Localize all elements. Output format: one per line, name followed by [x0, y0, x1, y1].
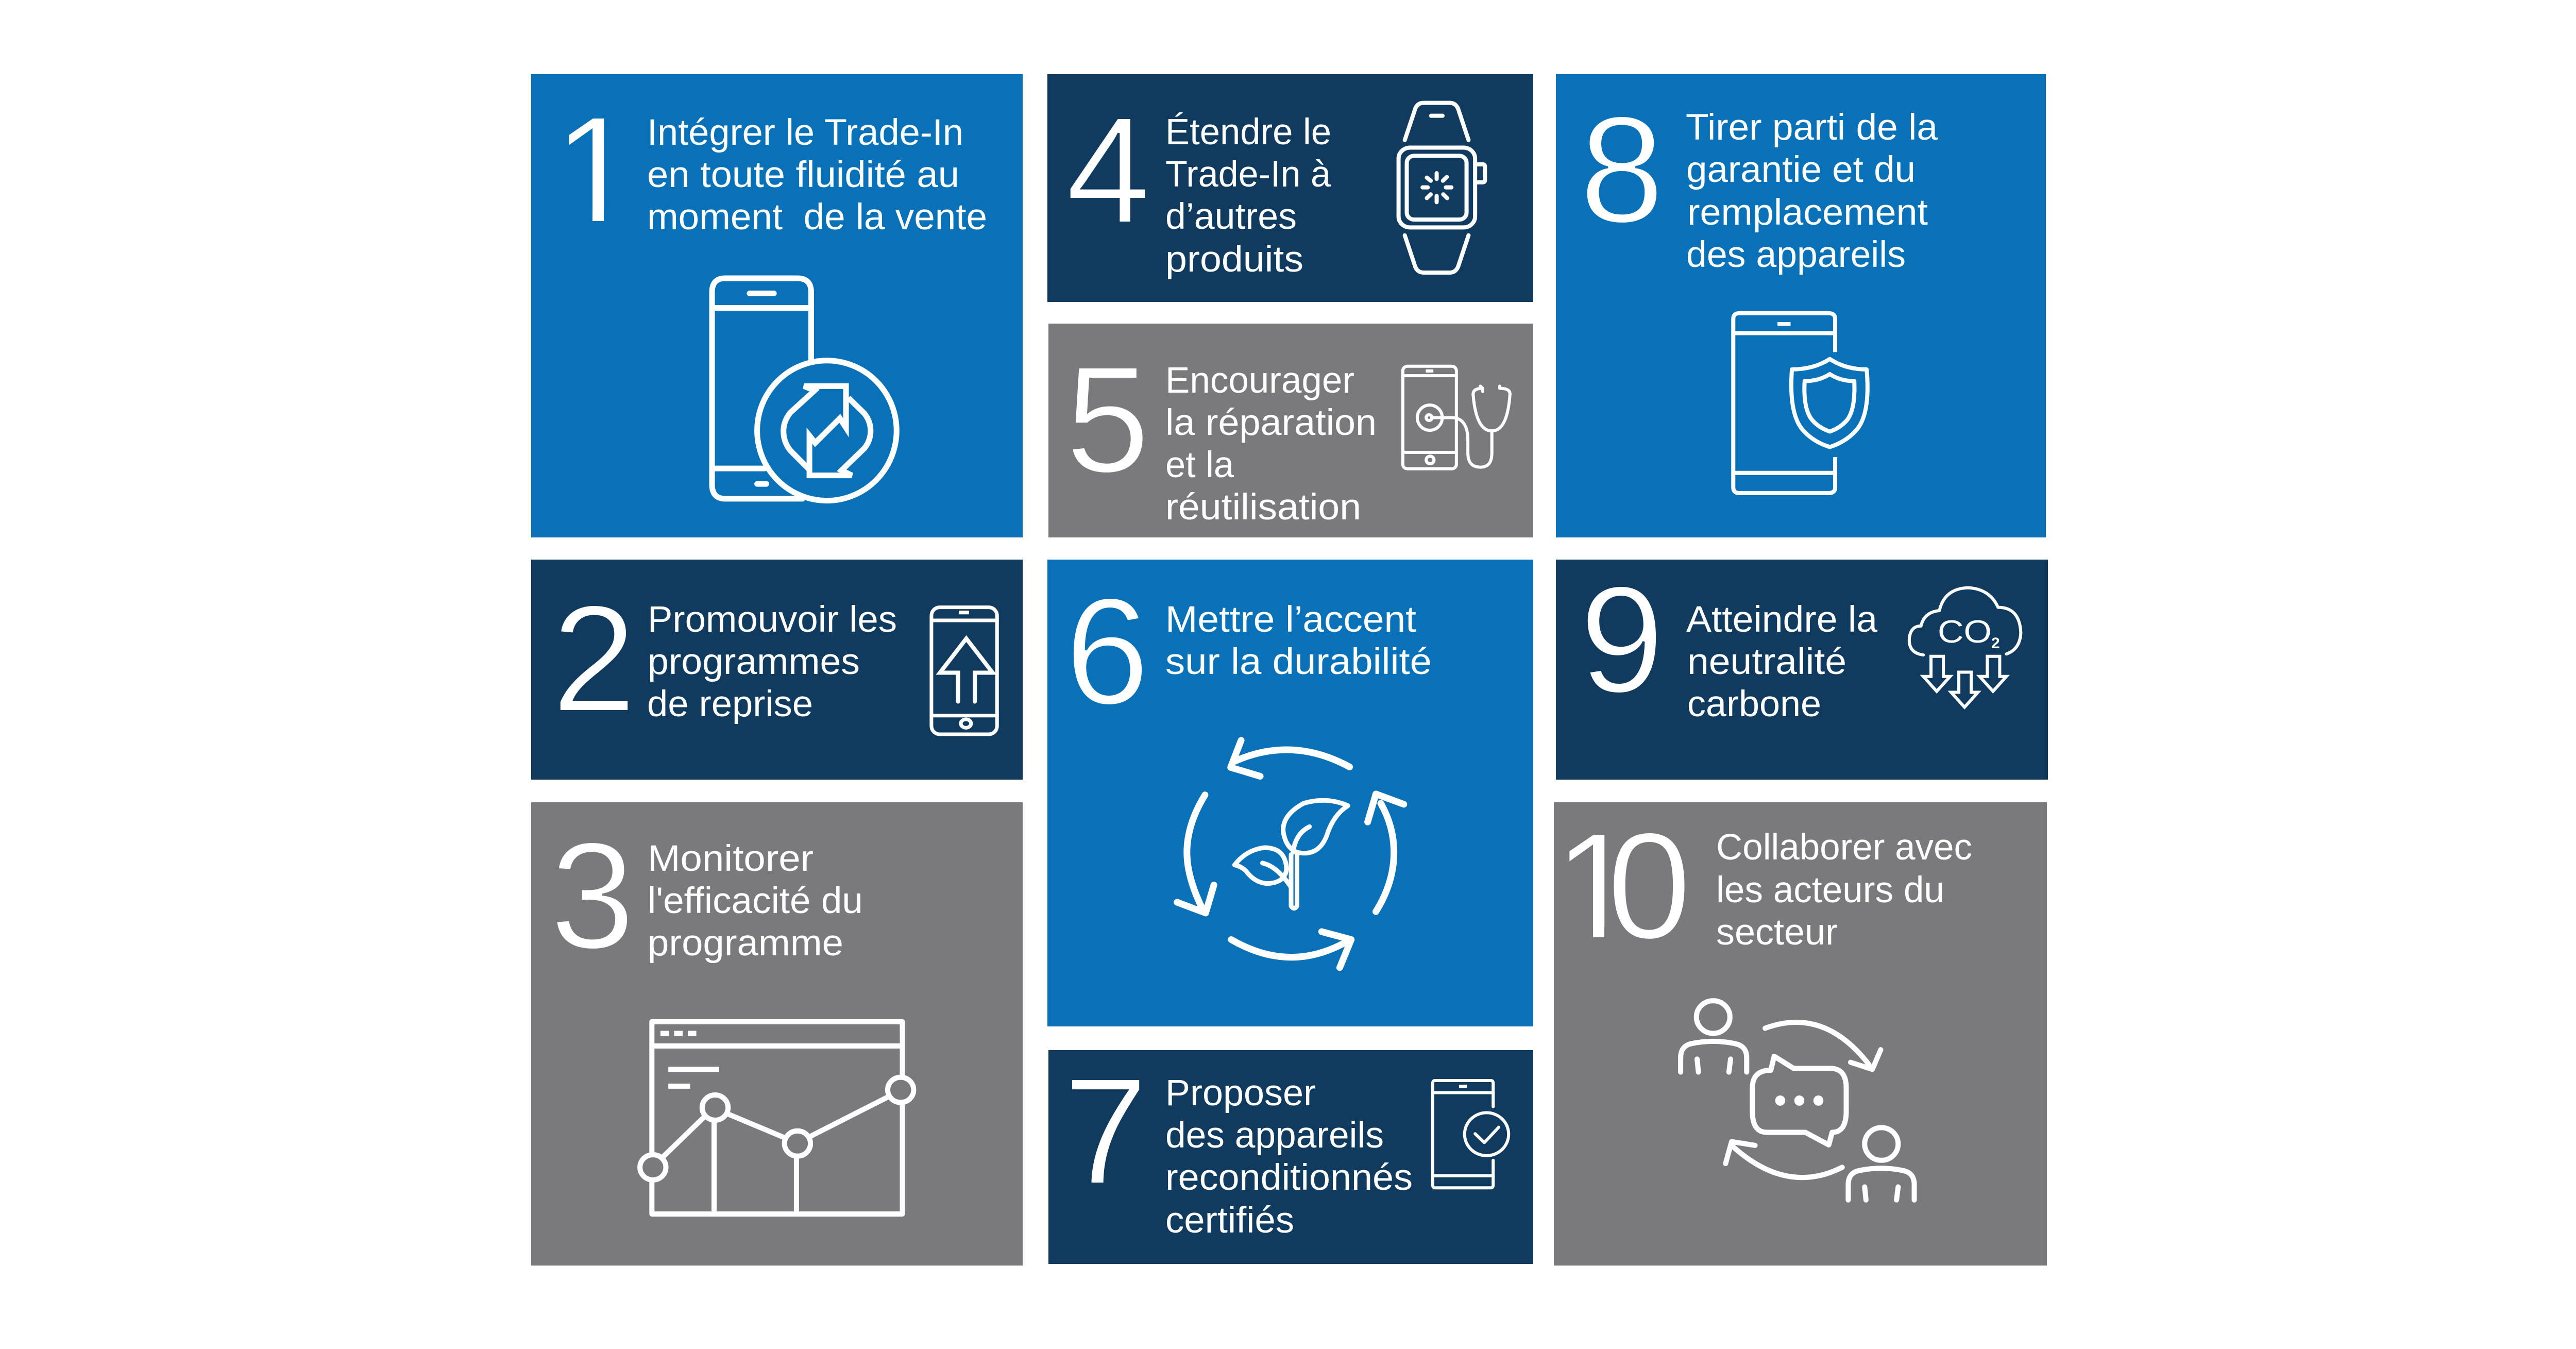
heading 3: programme: [648, 923, 843, 964]
icon: tablet with check mark: [1433, 1081, 1509, 1188]
heading 7: certifiés: [1165, 1200, 1294, 1241]
heading 10: Collaborer avec: [1716, 827, 1972, 868]
heading 4: Trade-In à: [1165, 154, 1331, 195]
heading 7: reconditionnés: [1165, 1157, 1413, 1198]
icon: phone with up arrow: [931, 608, 997, 734]
heading 4: [1165, 112, 1331, 280]
icon: phone with shield: [1733, 313, 1868, 493]
heading 2: [647, 599, 897, 724]
heading 1: moment de la vente: [647, 197, 987, 238]
panel 7: Proposer des appareils reconditionnés certifiés: [1048, 1046, 1533, 1264]
panel 8 background: [1556, 74, 2046, 537]
number 10: [1569, 833, 1685, 939]
panel 4: Étendre le Trade-In: [1047, 74, 1533, 302]
heading 2: Promouvoir les: [648, 599, 897, 640]
heading 8: des appareils: [1686, 234, 1906, 275]
panel 2: Promouvoir les programmes de reprise: [531, 560, 1023, 780]
number 1: 1: [553, 85, 638, 255]
heading 9: neutralité: [1687, 642, 1846, 682]
panel 7 background: [1048, 1050, 1533, 1264]
number 8: 8: [1580, 85, 1664, 255]
heading 4: Étendre le: [1165, 112, 1331, 153]
panel 9 background: [1556, 560, 2048, 780]
panel 4 background: [1047, 74, 1533, 302]
icon: phone with stethoscope: [1403, 366, 1510, 469]
heading 3: l'efficacité du: [648, 881, 863, 921]
number 10: 1: [1554, 801, 1638, 971]
panel 9: Atteindre la neutralité carbone: [1556, 554, 2048, 780]
heading 5: réutilisation: [1165, 487, 1361, 528]
panel 10 background: [1554, 802, 2047, 1266]
icon: CO2 cloud with down arrows: CO: [1938, 614, 1992, 650]
heading 10: secteur: [1716, 912, 1838, 953]
panel 10: Collaborer avec les acteurs du secteur: [1554, 801, 2047, 1266]
heading 10: les acteurs du: [1716, 870, 1944, 910]
heading 9: carbone: [1687, 684, 1821, 724]
heading 4: d’autres: [1165, 196, 1297, 237]
heading 8: Tirer parti de la: [1686, 107, 1938, 148]
heading 2: de reprise: [647, 684, 813, 724]
number 7: 7: [1063, 1046, 1148, 1216]
heading 2: programmes: [648, 642, 860, 682]
heading 5: la réparation: [1165, 402, 1377, 443]
heading 1: en toute fluidité au: [647, 155, 959, 195]
heading 7: Proposer: [1165, 1073, 1316, 1114]
icon: two people exchanging messages: [1681, 1001, 1914, 1200]
heading 4: produits: [1165, 239, 1303, 280]
number 3: 3: [550, 811, 635, 981]
heading 3: Monitorer: [648, 838, 814, 879]
panel 5 background: [1048, 324, 1533, 537]
panel 6: Mettre l'accent sur la durabilité: [1047, 560, 1533, 1026]
icon: CO2 cloud with down arrows: [1909, 588, 2021, 707]
panel 5: Encourager la réparation: [1048, 324, 1533, 537]
heading 9: [1686, 599, 1878, 724]
icon: smartwatch: [1399, 103, 1485, 273]
number 10: 0: [1607, 801, 1691, 971]
icon: phone with refresh arrows: [712, 278, 896, 501]
panel 1 background: [531, 74, 1023, 537]
panel 3: Monitorer l'efficacité du programme: [531, 802, 1023, 1266]
heading 6: sur la durabilité: [1165, 642, 1432, 682]
heading 8: remplacement: [1687, 192, 1928, 233]
heading 8: garantie et du: [1686, 149, 1916, 190]
heading 6: Mettre l’accent: [1165, 599, 1416, 640]
heading 5: et la: [1165, 445, 1234, 485]
panel 3 background: [531, 802, 1023, 1266]
icon: CO2 cloud with down arrows: 2: [1991, 635, 2000, 652]
panel 6 background: [1047, 560, 1533, 1026]
heading 10: [1716, 827, 1972, 953]
number 2: 2: [552, 574, 636, 744]
number 6: 6: [1065, 566, 1149, 736]
number 9: 9: [1580, 554, 1664, 724]
panel 8: Tirer parti de la garantie: [1556, 74, 2046, 537]
heading 1: Intégrer le Trade-In: [647, 112, 963, 153]
heading 8: [1686, 107, 1938, 275]
panel 2 background: [531, 560, 1023, 780]
heading 9: Atteindre la: [1686, 599, 1878, 640]
number 5: 5: [1065, 334, 1150, 504]
panel 1: Intégrer le Trade-In: [531, 74, 1023, 537]
number 4: 4: [1066, 85, 1150, 255]
heading 5: [1165, 360, 1377, 528]
heading 3: [648, 838, 863, 964]
heading 6: [1165, 599, 1432, 682]
heading 1: [647, 112, 987, 238]
heading 7: [1165, 1073, 1413, 1241]
icon: plant in circular arrows: [1177, 740, 1404, 968]
heading 5: Encourager: [1165, 360, 1354, 401]
icon: browser window with line chart: [640, 1022, 913, 1214]
heading 7: des appareils: [1165, 1115, 1384, 1156]
